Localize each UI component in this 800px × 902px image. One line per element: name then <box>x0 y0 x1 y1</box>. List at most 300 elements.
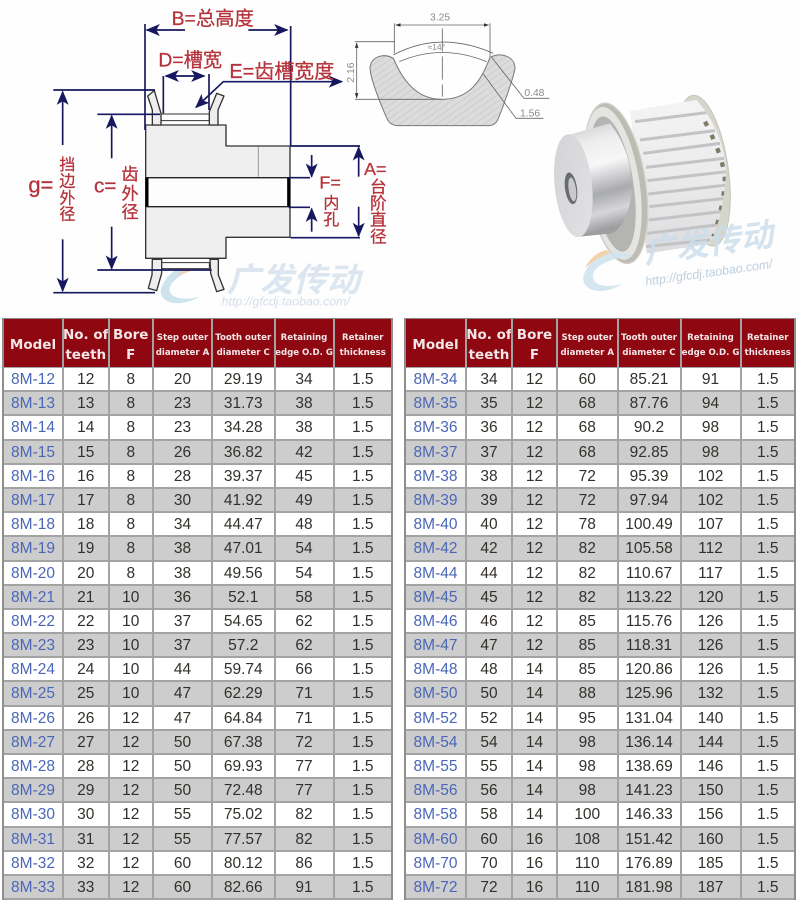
left specification table: 25 <box>77 685 94 702</box>
left specification table: 69.93 <box>224 758 263 775</box>
left specification table: 47 <box>174 685 191 702</box>
right specification table: 110 <box>575 879 600 896</box>
dimension lines <box>355 23 549 118</box>
right specification table: 144 <box>698 734 723 751</box>
dimension labels: 边 <box>59 173 75 191</box>
measurements: ≈14° <box>427 42 445 52</box>
left specification table: 1.5 <box>352 371 374 388</box>
left specification table: 8M-12 <box>11 371 55 388</box>
left specification table: 38 <box>295 395 313 412</box>
left specification table: 20 <box>77 564 94 582</box>
dimension labels: g= <box>28 173 53 198</box>
left specification table: 60 <box>174 879 191 896</box>
right specification table: 14 <box>526 782 543 799</box>
left specification table: 28 <box>77 758 94 775</box>
left specification table: 1.5 <box>352 516 374 533</box>
left specification table: 26 <box>77 710 94 727</box>
right specification table: 12 <box>526 444 543 461</box>
left specification table: 29 <box>77 782 94 799</box>
left specification table: 42 <box>295 444 313 461</box>
right specification table: 8M-34 <box>414 371 457 388</box>
right specification table: 98 <box>579 782 596 799</box>
left specification table: 82 <box>295 831 313 848</box>
right specification table: 56 <box>480 782 498 799</box>
left specification table: 23 <box>77 637 94 654</box>
dimension labels: F= <box>319 172 341 192</box>
pulley body outline <box>146 91 290 292</box>
left specification table: 1.5 <box>352 782 374 799</box>
left specification table: 36.82 <box>224 444 263 461</box>
right specification table: 8M-46 <box>414 613 457 630</box>
dimension labels: 外 <box>59 189 75 207</box>
right specification table: 1.5 <box>757 855 779 872</box>
left specification table: 8M-19 <box>11 540 55 557</box>
right specification table: 187 <box>698 879 723 896</box>
right specification table: 85.21 <box>630 371 668 388</box>
left specification table: 45 <box>295 468 313 485</box>
right specification table: 44 <box>480 564 498 582</box>
left specification table: 55 <box>174 806 191 823</box>
right specification table: 92.85 <box>630 444 668 461</box>
right specification table: 8M-55 <box>414 758 457 775</box>
right specification table: 60 <box>579 371 596 388</box>
left specification table: 21 <box>77 589 94 606</box>
right specification table: 12 <box>526 637 543 654</box>
right specification table: 8M-36 <box>414 419 457 436</box>
left table header: teeth <box>65 346 106 362</box>
right specification table: 8M-42 <box>414 540 457 557</box>
right table header: thickness <box>745 348 791 358</box>
right specification table: 118.31 <box>626 637 672 654</box>
right specification table: 85 <box>579 613 596 630</box>
right table header: No. of <box>467 326 512 342</box>
left specification table: 8 <box>126 395 135 412</box>
dimension labels: 阶 <box>370 194 387 213</box>
right table header: Tooth outer <box>621 333 677 343</box>
right specification table: 8M-44 <box>414 564 457 582</box>
right specification table: 78 <box>579 516 596 533</box>
right specification table: 97.94 <box>630 492 668 509</box>
left specification table: 38 <box>174 540 191 557</box>
right specification table: 8M-54 <box>414 734 457 751</box>
right specification table: 70 <box>480 855 498 872</box>
dimension labels: 径 <box>59 205 75 223</box>
left specification table: 8M-13 <box>11 395 55 412</box>
right specification table: 12 <box>526 395 543 412</box>
left specification table: 1.5 <box>352 540 374 557</box>
left specification table: 31.73 <box>224 395 263 412</box>
left specification table: 77 <box>295 782 313 799</box>
left specification table: 82.66 <box>224 879 263 896</box>
right specification table: 14 <box>526 661 543 678</box>
left specification table: 49.56 <box>224 564 263 582</box>
right specification table: 117 <box>698 564 723 582</box>
left specification table: 8M-22 <box>11 613 55 630</box>
left specification table: 8M-23 <box>11 637 55 654</box>
left specification table: 8M-24 <box>11 661 55 678</box>
right specification table: 1.5 <box>757 637 779 654</box>
left table header <box>4 319 391 368</box>
left specification table: 1.5 <box>352 444 374 461</box>
left specification table: 32 <box>77 855 94 872</box>
right specification table: 54 <box>480 734 498 751</box>
right specification table: 85 <box>579 661 596 678</box>
watermark: left logo: 广发传动 <box>227 263 364 300</box>
left specification table: 10 <box>122 661 139 678</box>
left table header: diameter C <box>217 348 270 358</box>
left specification table: 38 <box>174 564 191 582</box>
right specification table: 68 <box>579 395 596 412</box>
right specification table: 98 <box>702 444 719 461</box>
right specification table: 14 <box>526 685 543 702</box>
page background <box>0 0 800 312</box>
right specification table: 120 <box>698 589 723 606</box>
left specification table: 31 <box>77 831 94 848</box>
left specification table: 8M-25 <box>11 685 55 702</box>
left specification table: 66 <box>295 661 313 678</box>
right specification table: 8M-40 <box>414 516 457 533</box>
dimension labels: 径 <box>370 227 387 246</box>
right specification table: 12 <box>526 613 543 630</box>
watermark: left logo <box>161 263 364 309</box>
left specification table: 1.5 <box>352 710 374 727</box>
left specification table: 8M-20 <box>11 564 55 582</box>
right specification table: 12 <box>526 468 543 485</box>
measurements: 2.16 <box>346 62 357 83</box>
left specification table: 1.5 <box>352 589 374 606</box>
left specification table: 8M-15 <box>11 444 55 461</box>
right specification table: 82 <box>579 589 596 606</box>
right specification table: 72 <box>480 879 498 896</box>
right table header: diameter C <box>622 348 676 358</box>
left specification table: 62.29 <box>224 685 263 702</box>
hub <box>568 123 632 237</box>
tooth ends <box>705 122 725 237</box>
panel: tooth profile drawing <box>346 13 549 126</box>
left specification table: 82 <box>295 806 313 823</box>
left specification table: 1.5 <box>352 685 374 702</box>
left table header: Tooth outer <box>215 333 271 343</box>
left specification table: 22 <box>77 613 94 630</box>
left specification table: 67.38 <box>224 734 263 751</box>
left specification table: 8M-29 <box>11 782 55 799</box>
right specification table: 1.5 <box>757 806 779 823</box>
left specification table: 54 <box>295 564 313 582</box>
dimension labels: 孔 <box>323 211 339 229</box>
right specification table: 37 <box>480 444 498 461</box>
left specification table: 8M-31 <box>11 831 55 848</box>
left specification table: 12 <box>122 734 139 751</box>
right specification table: 87.76 <box>630 395 668 412</box>
right specification table: 36 <box>480 419 498 436</box>
right specification table: 82 <box>579 564 596 582</box>
left specification table: 12 <box>122 758 139 775</box>
left specification table: 8 <box>126 444 135 461</box>
right specification table: 150 <box>698 782 723 799</box>
right specification table: 98 <box>579 758 596 775</box>
front flange <box>574 99 658 268</box>
right specification table: 39 <box>480 492 498 509</box>
left table header: F <box>126 346 135 362</box>
right table header: Retainer <box>747 333 788 343</box>
right specification table: 1.5 <box>757 564 779 582</box>
left specification table: 1.5 <box>352 806 374 823</box>
left specification table: 1.5 <box>352 468 374 485</box>
right specification table: 72 <box>579 468 596 485</box>
right specification table: 181.98 <box>625 879 673 896</box>
right specification table: 14 <box>526 734 543 751</box>
left specification table: 17 <box>77 492 94 509</box>
left specification table: 15 <box>77 444 94 461</box>
right table header: edge O.D. G <box>682 348 739 358</box>
right specification table: 113.22 <box>626 589 672 606</box>
left specification table: 77.57 <box>224 831 263 848</box>
left specification table: 64.84 <box>224 710 263 727</box>
right specification table: 8M-39 <box>414 492 457 509</box>
left specification table: 37 <box>174 637 191 654</box>
right specification table: 8M-50 <box>414 685 457 702</box>
right specification table: 1.5 <box>757 395 779 412</box>
right specification table: 126 <box>698 661 723 678</box>
right specification table: 16 <box>526 831 543 848</box>
right specification table: 108 <box>574 831 600 848</box>
right specification table: 98 <box>579 734 596 751</box>
right specification table: 110 <box>575 855 600 872</box>
right specification table: 176.89 <box>625 855 673 872</box>
left specification table: 1.5 <box>352 831 374 848</box>
right specification table: 12 <box>526 589 543 606</box>
bore <box>563 172 579 205</box>
left specification table: 12 <box>77 371 94 388</box>
left specification table: 39.37 <box>224 468 263 485</box>
left table header: Bore <box>113 326 148 342</box>
left specification table: 10 <box>122 613 139 630</box>
left specification table: 8M-30 <box>11 806 55 823</box>
dimension labels: D=槽宽 <box>158 50 222 72</box>
left specification table: 16 <box>77 468 94 485</box>
right specification table: 1.5 <box>757 879 779 896</box>
right specification table: 88 <box>579 685 596 702</box>
left specification table: 1.5 <box>352 613 374 630</box>
right specification table: 1.5 <box>757 758 779 775</box>
watermark: right logo: http://gfcdj.taobao.com/ <box>644 257 775 289</box>
right specification table: 8M-72 <box>414 879 457 896</box>
right specification table: 131.04 <box>625 710 673 727</box>
left specification table: 8 <box>126 540 135 557</box>
left specification table: 10 <box>122 685 139 702</box>
left specification table: 86 <box>295 855 313 872</box>
right specification table: 55 <box>480 758 498 775</box>
dimension labels: E=齿槽宽度 <box>229 60 334 83</box>
left table header: thickness <box>340 348 386 358</box>
left specification table: 38 <box>295 419 313 436</box>
right specification table: 120.86 <box>625 661 673 678</box>
right specification table: 91 <box>702 371 719 388</box>
left specification table: 8 <box>126 516 135 533</box>
watermark: right logo: 广发传动 <box>641 215 780 270</box>
right specification table: 100.49 <box>625 516 673 533</box>
left specification table: 26 <box>174 444 191 461</box>
right specification table: 12 <box>526 419 543 436</box>
right specification table: 140 <box>698 710 723 727</box>
dimension labels: c= <box>94 175 116 198</box>
left specification table: 62 <box>295 637 313 654</box>
left specification table: 71 <box>295 685 313 702</box>
right specification table: 105.58 <box>625 540 673 557</box>
left specification table: 1.5 <box>352 395 374 412</box>
left specification table: 50 <box>174 758 191 775</box>
right specification table: 8M-52 <box>414 710 457 727</box>
right specification table: 146.33 <box>625 806 673 823</box>
right specification table: 8M-45 <box>414 589 457 606</box>
left specification table: 27 <box>77 734 94 751</box>
right specification table: 72 <box>579 492 596 509</box>
right specification table: 14 <box>526 710 543 727</box>
left specification table: 23 <box>174 419 191 436</box>
panel: pulley cross-section diagram <box>28 8 387 309</box>
dimension lines and arrows <box>53 24 360 293</box>
right specification table: 52 <box>480 710 498 727</box>
top illustration area <box>28 8 780 309</box>
left specification table: 10 <box>122 589 139 606</box>
dimension labels: 内 <box>323 194 339 212</box>
right specification table: 107 <box>698 516 723 533</box>
right specification table: 126 <box>698 637 723 654</box>
right specification table <box>404 318 796 900</box>
right specification table: 1.5 <box>757 492 779 509</box>
left specification table: 72 <box>295 734 313 751</box>
right specification table: 98 <box>702 419 719 436</box>
right specification table: 95 <box>579 710 596 727</box>
right specification table: 16 <box>526 855 543 872</box>
right specification table: 48 <box>480 661 498 678</box>
right specification table: 1.5 <box>757 540 779 557</box>
left specification table: 47.01 <box>224 540 263 557</box>
right specification table: 46 <box>480 613 498 630</box>
right specification table: 1.5 <box>757 831 779 848</box>
right specification table: 82 <box>579 540 596 557</box>
right specification table: 1.5 <box>757 734 779 751</box>
right specification table: 115.76 <box>626 613 672 630</box>
dimension labels: 台 <box>370 177 387 196</box>
right specification table: 132 <box>698 685 723 702</box>
right specification table: 12 <box>526 564 543 582</box>
right specification table: 68 <box>579 444 596 461</box>
right specification table: 1.5 <box>757 589 779 606</box>
right specification table: 1.5 <box>757 419 779 436</box>
measurements: 3.25 <box>430 13 450 24</box>
right specification table: 138.69 <box>625 758 673 775</box>
right specification table: 1.5 <box>757 444 779 461</box>
right specification table: 141.23 <box>625 782 673 799</box>
pulley photo <box>549 92 739 268</box>
right specification table: 1.5 <box>757 710 779 727</box>
left specification table: 29.19 <box>224 371 263 388</box>
right table header: Step outer <box>562 333 613 343</box>
left table header: edge O.D. G <box>276 348 333 358</box>
left specification table: 8M-18 <box>11 516 55 533</box>
left specification table: 8M-26 <box>11 710 55 727</box>
left specification table: 8 <box>126 371 135 388</box>
right specification table: 8M-48 <box>414 661 457 678</box>
left specification table: 1.5 <box>352 637 374 654</box>
left specification table: 1.5 <box>352 419 374 436</box>
dimension labels: 外 <box>121 183 139 203</box>
left specification table: 44.47 <box>224 516 263 533</box>
dimension labels <box>28 8 387 246</box>
dimension labels: A= <box>364 159 386 179</box>
toothed cylinder <box>630 100 726 253</box>
left specification table: 54 <box>295 540 313 557</box>
left specification table <box>2 318 393 900</box>
measurements: 1.56 <box>520 109 540 120</box>
left specification table: 8M-17 <box>11 492 55 509</box>
left specification table: 1.5 <box>352 492 374 509</box>
right specification table: 95.39 <box>630 468 668 485</box>
right specification table: 50 <box>480 685 498 702</box>
dimension labels: 齿 <box>121 164 139 184</box>
right table header: Bore <box>517 326 552 342</box>
right specification table: 8M-70 <box>414 855 457 872</box>
left specification table: 49 <box>295 492 313 509</box>
left specification table: 77 <box>295 758 313 775</box>
left specification table: 57.2 <box>228 637 258 654</box>
left specification table: 80.12 <box>224 855 263 872</box>
right specification table: 34 <box>480 371 498 388</box>
right specification table: 8M-38 <box>414 468 457 485</box>
left specification table: 36 <box>174 589 191 606</box>
left specification table: 8 <box>126 564 135 582</box>
right specification table: 126 <box>698 613 723 630</box>
watermark: right logo <box>583 215 780 291</box>
left specification table: 52.1 <box>228 589 258 606</box>
left table header: Retaining <box>281 333 327 343</box>
left specification table: 34.28 <box>224 419 263 436</box>
right specification table: 42 <box>480 540 498 557</box>
left specification table: 19 <box>77 540 94 557</box>
left specification table: 62 <box>295 613 313 630</box>
left specification table: 12 <box>122 831 139 848</box>
left specification table: 58 <box>295 589 313 606</box>
left table header: No. of <box>64 326 109 342</box>
left specification table: 8M-16 <box>11 468 55 485</box>
right specification table: 38 <box>480 468 498 485</box>
left specification table: 44 <box>174 661 191 678</box>
left specification table: 8 <box>126 419 135 436</box>
left specification table: 1.5 <box>352 661 374 678</box>
watermark: left logo: http://gfcdj.taobao.com/ <box>222 295 351 309</box>
left specification table: 1.5 <box>352 734 374 751</box>
right specification table: 146 <box>698 758 723 775</box>
left specification table: 71 <box>295 710 313 727</box>
left specification table: 14 <box>77 419 94 436</box>
left specification table: 47 <box>174 710 191 727</box>
right table header: teeth <box>469 346 509 362</box>
left specification table: 59.74 <box>224 661 263 678</box>
right specification table: 160 <box>698 831 723 848</box>
left specification table: 60 <box>174 855 191 872</box>
right specification table: 125.96 <box>625 685 673 702</box>
left specification table: 8M-33 <box>11 879 55 896</box>
left specification table: 23 <box>174 395 191 412</box>
left specification table: 30 <box>77 806 94 823</box>
left specification table: 12 <box>122 879 139 896</box>
right specification table: 45 <box>480 589 498 606</box>
left specification table: 10 <box>122 637 139 654</box>
right specification table: 14 <box>526 758 543 775</box>
right specification table: 1.5 <box>757 516 779 533</box>
left specification table: 1.5 <box>352 879 374 896</box>
